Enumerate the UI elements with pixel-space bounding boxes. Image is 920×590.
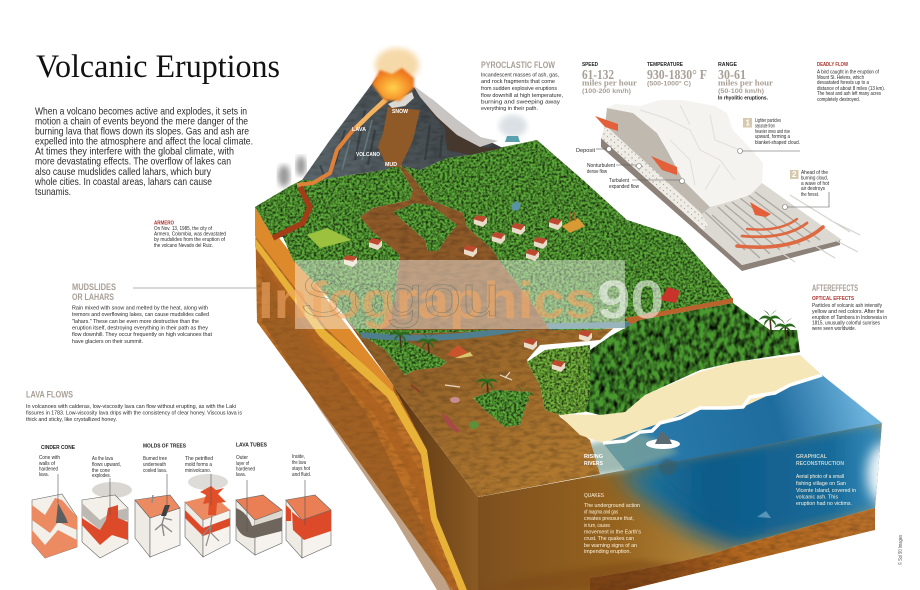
watermark: 90 — [597, 270, 664, 330]
panel: aftereffects — [811, 283, 887, 332]
panel: mudslides or lahars: eruption itself, destroying everything in their path as they — [72, 326, 208, 332]
diagram: cone explodes block: the cone — [92, 468, 110, 474]
text on section: graphical reconstruction: Vicente Island, covered in — [796, 488, 856, 494]
diagram: outer layer lava tube block: Outer — [236, 455, 248, 461]
callout: Armero: by mudslides from the eruption of — [154, 237, 225, 243]
diagram: minivolcano block: mold forms a — [185, 462, 213, 468]
diagram: minivolcano block: The petrified — [185, 456, 213, 462]
callout: step 1 lighter particles: separate from — [755, 124, 775, 130]
credit: © Sol 90 Images — [897, 535, 904, 565]
palm forest — [577, 303, 800, 415]
label: turbulent expanded flow: Turbulent — [609, 178, 629, 184]
orange flow arrows — [595, 116, 771, 217]
label: rising rivers: RIVERS — [584, 461, 603, 467]
callout: step 2 wave of hot air: air destroys — [801, 186, 825, 192]
lava delta at plateau — [273, 187, 310, 238]
mud on cone — [378, 107, 420, 167]
diagram: cone explodes block: flows upward, — [92, 462, 121, 468]
text on section: graphical reconstruction: volcanic ash. This — [796, 494, 838, 500]
title: Volcanic Eruptions — [36, 49, 280, 85]
callout: deadly flow: Mount St. Helens, which — [817, 75, 864, 81]
right cross-section earth and sea — [478, 423, 901, 590]
diagram: cinder cone block: lava. — [39, 472, 49, 478]
intro text block: burning lava that flows down its slopes. Gas and ash are — [35, 126, 249, 138]
slab side band — [601, 138, 840, 271]
text on section: quakes: in turn, causes — [584, 523, 610, 529]
panel: pyroclastic flow text: everything in their path. — [481, 106, 538, 112]
diagram: cone explodes block: explodes. — [92, 473, 111, 479]
panel: aftereffects: yellow and red colors. After the — [812, 309, 884, 315]
stat: speed: (100-200 km/h) — [582, 89, 631, 95]
intro text block: When a volcano becomes active and explodes, it sets in — [35, 106, 247, 118]
label: turbulent expanded flow: expanded flow — [609, 184, 640, 190]
intro text block: tsunamis. — [35, 187, 71, 198]
label: rising rivers: RISING — [584, 454, 603, 460]
diagram: inner lava tube block: stays hot — [292, 466, 310, 472]
panel: aftereffects: OPTICAL EFFECTS — [812, 296, 854, 302]
stat: speed: miles per hour — [582, 78, 637, 88]
diagram: inner lava tube block — [286, 454, 331, 558]
text on section: quakes: The underground action — [584, 503, 640, 509]
intro text block: motion a chain of events beyond the mere danger of the — [35, 116, 248, 128]
text on section: graphical reconstruction — [796, 454, 856, 507]
left cross-section strata — [255, 207, 478, 590]
volcano cone — [297, 77, 503, 185]
mudflows from volcano — [360, 165, 550, 330]
grey deposit — [605, 108, 710, 214]
diagram: burned tree mold block — [135, 444, 186, 557]
panel: pyroclastic flow text: flow downhill at high temperature, — [481, 93, 563, 99]
text on section: quakes: crust. The quakes can — [584, 536, 634, 542]
text on section: graphical reconstruction: eruption had no victims. — [796, 501, 852, 507]
stat: temperature: TEMPERATURE — [647, 62, 683, 68]
volcano labels: MUD — [385, 162, 397, 168]
callout: step 2 wave of hot air: Ahead of the — [801, 170, 828, 176]
forest surface with flattened trees — [698, 183, 860, 265]
diagram: outer layer lava tube block: lava. — [236, 472, 246, 478]
volcano labels: LAVA — [352, 127, 366, 133]
volcano labels: VOLCANO — [356, 152, 381, 158]
diagram: burned tree mold block: MOLDS OF TREES — [143, 444, 186, 450]
panel: aftereffects: 1815, unusually colorful sunrises — [812, 320, 880, 326]
text on section: graphical reconstruction: GRAPHICAL — [796, 454, 828, 460]
intro text block: also cause mudslides called lahars, which bury — [35, 167, 212, 178]
white ash cloud — [607, 100, 763, 207]
debris in mud — [411, 372, 512, 433]
watermark: Infographics — [258, 272, 596, 330]
panel: pyroclastic flow text: from sudden explosive eruptions — [481, 86, 557, 92]
callout: deadly flow — [817, 62, 885, 103]
intro text block: whole cities. In coastal areas, lahars can cause — [34, 177, 212, 188]
diagram: cone explodes block: As the lava — [92, 456, 114, 462]
callout: step 1 lighter particles: blanket-shaped cloud. — [755, 140, 800, 146]
label: rising rivers — [584, 454, 603, 467]
orange shock wave arcs — [737, 219, 823, 247]
lower left green strip — [355, 330, 447, 375]
terrace cliff edge — [625, 298, 733, 324]
panel: mudslides or lahars — [72, 282, 258, 345]
stat: temperature: (500-1000° C) — [647, 82, 691, 88]
panel: mudslides or lahars: Rain mixed with snow and melted by the heat, along with — [72, 306, 208, 312]
callout: step 1 lighter particles: upward, forming a — [755, 134, 791, 140]
panel: pyroclastic flow text: PYROCLASTIC FLOW — [481, 60, 555, 70]
callout: deadly flow: The heat and ash left many acres — [817, 91, 881, 97]
callout: step 1 lighter particles: heavier ones and rise — [755, 129, 790, 135]
stat: range: 30-61 — [718, 67, 746, 82]
callout: step 1 lighter particles: Lighter particles — [755, 118, 781, 124]
diagram: pyroclastic flow slab — [595, 100, 860, 271]
stat: speed: SPEED — [582, 62, 598, 68]
diagram: cinder cone block: CINDER CONE — [41, 445, 75, 451]
diagram: cone explodes block — [82, 456, 132, 558]
label: nonturbulent dense flow: dense flow — [587, 169, 608, 175]
callout: step 2 wave of hot air: burning cloud, — [801, 176, 828, 182]
text on section: graphical reconstruction: RECONSTRUCTION — [796, 461, 844, 467]
snow patch at crater — [388, 92, 414, 108]
callout: Armero: On Nov. 13, 1985, the city of — [154, 226, 212, 232]
panel: pyroclastic flow text: and rock fragments that come — [481, 79, 555, 85]
foam wave line — [603, 375, 822, 443]
side vents smoke — [278, 115, 527, 187]
green island in mud — [473, 390, 530, 427]
diagram: outer layer lava tube block: LAVA TUBES — [236, 442, 267, 448]
callout: deadly flow: A bird caught in the eruption of — [817, 70, 879, 76]
stat: range: (50-100 km/h) — [718, 89, 764, 95]
mud field — [345, 318, 625, 497]
stat: temperature — [647, 62, 707, 88]
callout: deadly flow: devastated forests up to a — [817, 80, 870, 86]
panel: aftereffects: eruption of Tambora in Indonesia in — [812, 315, 887, 321]
label: turbulent expanded flow — [609, 178, 684, 190]
text on section: quakes: creates pressure that, — [584, 516, 634, 522]
panel: pyroclastic flow text — [481, 60, 563, 112]
panel: lava flows text: thick and sticky, like crystallized honey. — [26, 417, 117, 423]
light green field — [307, 228, 352, 248]
panel: pyroclastic flow text: Incandescent masses of ash, gas, — [481, 72, 559, 78]
sea surface — [603, 375, 882, 470]
stat: range: miles per hour — [718, 78, 773, 88]
text on section: quakes: impending eruption. — [584, 549, 631, 555]
label: nonturbulent dense flow: Nonturbulent — [587, 163, 615, 169]
diagram: burned tree mold block: cooled lava. — [143, 468, 167, 474]
callout: Armero — [154, 220, 226, 249]
text on section: quakes: movement in the Earth's — [584, 530, 641, 536]
panel: mudslides or lahars: have glaciers on their summit. — [72, 339, 143, 345]
palm trees on edges — [389, 310, 796, 407]
stat: speed: 61-132 — [582, 67, 614, 82]
text on section: quakes: QUAKES — [584, 493, 604, 499]
intro text block: more devastating effects. The overflow of lakes can — [35, 156, 231, 168]
callout: Armero: ARMERO — [154, 220, 175, 226]
panel: lava flows text — [26, 390, 242, 423]
watermark — [258, 260, 664, 330]
callout: step 1 lighter particles: 1 — [746, 118, 750, 128]
callout: Armero: Armero, Colombia, was devastated — [154, 232, 226, 238]
panel: mudslides or lahars: OR LAHARS — [72, 292, 114, 302]
callout: step 2 wave of hot air: 2 — [792, 170, 797, 179]
panel: aftereffects: Particles of volcanic ash intensify — [812, 303, 882, 309]
diagram: cinder cone block: hardened — [39, 466, 58, 472]
text on section: quakes: be warning signs of an — [584, 543, 637, 549]
eruption plume — [372, 48, 419, 101]
diagram: outer layer lava tube block: hardened — [236, 466, 255, 472]
text on section: quakes: of magma and gas — [584, 510, 618, 516]
callout: step 2 wave of hot air: the forest. — [801, 192, 819, 198]
river mouth blending mud to sea — [585, 432, 680, 476]
stat: temperature: 930-1830° F — [647, 67, 707, 82]
callout: step 2 wave of hot air: a wave of hot — [801, 181, 829, 187]
watermark: Sogou — [300, 264, 500, 329]
green meadow around white houses — [527, 345, 590, 415]
diagram: burned tree mold block: Burned tree — [143, 456, 167, 462]
volcano labels — [352, 109, 409, 168]
label: deposit: Deposit — [576, 148, 595, 154]
text on section: graphical reconstruction: Aerial photo of a small — [796, 474, 844, 480]
panel: aftereffects: AFTEREFFECTS — [812, 283, 858, 293]
callout: deadly flow: distance of about 8 miles (13 km). — [817, 86, 885, 92]
panel: aftereffects: were seen worldwide. — [811, 326, 856, 332]
intro text block: At times they interfere with the global climate, with — [35, 146, 234, 158]
callout: step 2 wave of hot air — [782, 170, 829, 210]
speckled flow strip — [601, 125, 708, 230]
text on section: graphical reconstruction: fishing village on San — [796, 481, 846, 487]
diagram: inner lava tube block: and fluid. — [292, 472, 311, 478]
callout: deadly flow: completely destroyed. — [817, 97, 860, 103]
diagram: minivolcano block — [185, 456, 230, 557]
villages on plateau — [343, 201, 680, 303]
forest island within mudflow — [393, 203, 457, 251]
block diagram: volcanic landscape — [255, 48, 901, 590]
diagram: inner lava tube block: Inside, — [292, 454, 305, 460]
snow band — [413, 85, 498, 147]
label: nonturbulent dense flow — [587, 163, 642, 175]
diagram: burned tree mold block: underneath — [143, 462, 166, 468]
panel: mudslides or lahars: MUDSLIDES — [72, 282, 116, 292]
beach — [558, 355, 822, 443]
diagram: minivolcano block: minivolcano. — [185, 468, 211, 474]
sunken rock island — [646, 431, 771, 518]
green plateau — [255, 140, 733, 335]
intro text block — [34, 106, 253, 198]
diagram: cinder cone block — [32, 445, 77, 558]
panel: mudslides or lahars: "lahars." These can be even more destructive than the — [72, 319, 199, 325]
houses on mudflat — [447, 330, 592, 372]
panel: lava flows text: In volcanoes with calderas, low-viscosity lava can flow without erupting, as with the Laki — [26, 404, 236, 410]
stat: range: In rhyolitic eruptions. — [718, 96, 768, 102]
text on section: quakes — [584, 493, 641, 555]
intro text block: expelled into the atmosphere and affect the local climate. — [35, 136, 253, 148]
callout: step 1 lighter particles — [738, 118, 800, 154]
panel: lava flows text: fissures in 1783. Low-viscosity lava drips with the consistency of clear honey. Viscous lava is — [26, 410, 242, 416]
callout: Armero: the volcano Nevado del Ruiz. — [154, 243, 213, 249]
brown shadow under snow — [420, 100, 503, 155]
panel: mudslides or lahars: flow downhill. They occur frequently on high volcanoes that — [72, 332, 212, 338]
callout: deadly flow: DEADLY FLOW — [817, 62, 849, 68]
diagram: inner lava tube block: the lava — [292, 460, 307, 466]
label: deposit — [576, 146, 612, 154]
diagram: outer layer lava tube block — [236, 442, 282, 555]
stat: range: RANGE — [718, 62, 737, 68]
panel: lava flows text: LAVA FLOWS — [26, 390, 73, 400]
volcano labels: SNOW — [392, 109, 409, 115]
diagram: cinder cone block: Cone with — [39, 455, 60, 461]
river under cliff terrace — [360, 322, 640, 341]
stat: speed — [582, 62, 637, 95]
stat: range — [718, 62, 773, 102]
lava stream — [297, 100, 387, 185]
panel: mudslides or lahars: tremors and overflowing lakes, can cause mudslides called — [72, 312, 209, 318]
diagram: outer layer lava tube block: layer of — [236, 461, 249, 467]
diagram: cinder cone block: walls of — [38, 461, 55, 467]
panel: pyroclastic flow text: burning and sweeping away — [481, 100, 560, 106]
